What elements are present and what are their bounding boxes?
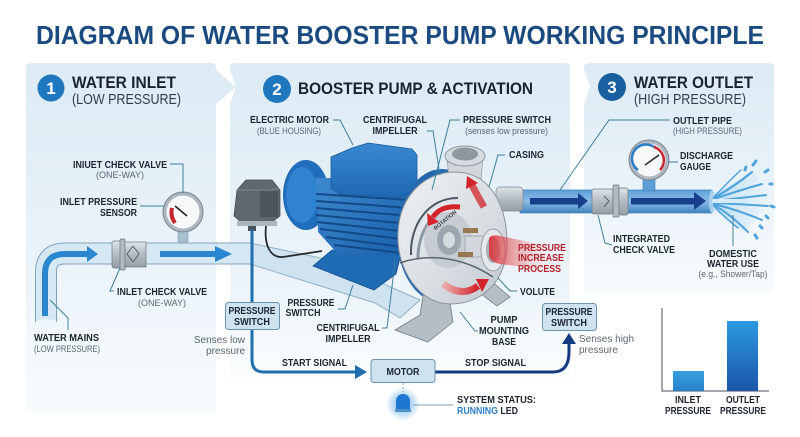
label: system status: RUNNING LED — [457, 406, 518, 417]
casing eye shaft — [458, 228, 505, 271]
label: pump mounting base: BASE — [492, 337, 516, 348]
motor terminal box — [331, 143, 417, 197]
label: pressure increase process: INCREASE — [518, 252, 564, 264]
label: pump mounting base — [479, 315, 529, 348]
title: DIAGRAM OF WATER BOOSTER PUMP WORKING PRINCIPLE — [36, 20, 764, 50]
axis label: inlet pressure: INLET — [675, 395, 702, 406]
inlet pipe — [35, 246, 252, 327]
label: water mains — [34, 333, 100, 354]
label: senses high pressure: pressure — [579, 345, 618, 356]
casing front lip — [400, 258, 493, 277]
axis label: inlet pressure — [665, 395, 711, 417]
box: motor: MOTOR — [386, 367, 420, 378]
axis label: inlet pressure: PRESSURE — [665, 406, 711, 417]
arrow: rotation: ROTATION — [433, 209, 458, 232]
label: pressure switch lower — [286, 298, 335, 319]
label: domestic water use: DOMESTIC — [709, 249, 758, 260]
heading: step 3 water outlet — [598, 73, 754, 108]
box: motor — [371, 360, 435, 382]
label: centrifugal impeller lower: CENTRIFUGAL — [316, 323, 380, 334]
label: centrifugal impeller top — [363, 115, 427, 137]
outlet neck — [447, 155, 483, 195]
label: centrifugal impeller top: IMPELLER — [372, 126, 418, 137]
arrow: inlet flow elbow — [45, 246, 98, 316]
label: pressure switch lower: PRESSURE — [288, 298, 335, 309]
motor ribbed body — [316, 178, 410, 256]
arrow: pressure rise up — [466, 176, 484, 207]
heading: step 3 water outlet: (HIGH PRESSURE) — [634, 91, 746, 108]
label: senses high pressure: Senses high — [579, 334, 634, 345]
bar: outlet pressure — [727, 321, 758, 391]
heading: step 3 water outlet: 3 — [607, 78, 617, 97]
label: iniuet check valve: INIUET CHECK VALVE — [73, 160, 167, 171]
axis label: outlet pressure: OUTLET — [726, 395, 761, 406]
label: pressure switch top — [463, 115, 551, 136]
icon: inlet check valve — [112, 239, 146, 270]
label: water mains: (LOW PRESSURE) — [34, 344, 100, 354]
label: pressure increase process: PRESSURE — [518, 242, 566, 254]
icon: water spray — [713, 161, 774, 238]
pressure glow — [489, 235, 550, 270]
label: domestic water use — [698, 249, 768, 279]
label: outlet pipe: OUTLET PIPE — [673, 116, 732, 127]
label: senses high pressure — [579, 334, 634, 356]
label: pump mounting base: PUMP — [490, 315, 518, 326]
label: volute: VOLUTE — [520, 287, 555, 298]
label: iniuet check valve — [73, 160, 167, 180]
motor foot — [313, 250, 402, 290]
label: inlet check valve — [117, 287, 207, 308]
label: pressure increase process — [518, 242, 566, 275]
box: pressure switch left: PRESSURE — [228, 306, 276, 317]
casing volute body — [398, 172, 507, 304]
heading: step 1 water inlet: 1 — [46, 79, 56, 98]
signal line: start — [252, 230, 367, 379]
box: pressure switch right: SWITCH — [551, 318, 587, 329]
bar: inlet pressure — [673, 371, 704, 391]
label: iniuet check valve: (ONE-WAY) — [96, 170, 144, 180]
pump foot left — [395, 290, 453, 342]
heading: step 1 water inlet: (LOW PRESSURE) — [72, 91, 181, 108]
side discharge — [496, 187, 523, 211]
pump foot right — [476, 280, 510, 306]
panel: water inlet background — [26, 63, 236, 413]
impeller cavity — [405, 190, 472, 268]
label: pressure switch top: PRESSURE SWITCH — [463, 115, 551, 126]
icon: running LED — [386, 383, 453, 421]
label: pressure increase process: PROCESS — [518, 263, 561, 275]
heading: step 1 water inlet — [38, 73, 181, 108]
label: integrated check valve: CHECK VALVE — [613, 245, 675, 256]
label: casing: CASING — [509, 150, 544, 161]
arrow: rotation — [427, 207, 460, 232]
outlet pipe — [520, 190, 715, 213]
label: system status: SYSTEM STATUS: — [457, 395, 536, 406]
label: domestic water use: WATER USE — [707, 259, 759, 270]
heading: step 3 water outlet: WATER OUTLET — [634, 73, 754, 92]
label: pressure switch top: (senses low pressure) — [465, 126, 548, 136]
leader lines — [50, 120, 733, 331]
label: pump mounting base: MOUNTING — [479, 326, 529, 337]
signal line: stop — [435, 333, 576, 372]
label: senses low pressure — [194, 335, 246, 357]
label: inlet check valve: INLET CHECK VALVE — [117, 287, 207, 298]
label: inlet pressure sensor: INLET PRESSURE — [60, 197, 137, 208]
arrow: outlet flow right — [631, 192, 706, 210]
label: electric motor: (BLUE HOUSING) — [257, 126, 321, 136]
label: electric motor — [250, 115, 330, 136]
axis label: outlet pressure — [720, 395, 766, 417]
label: discharge gauge: GAUGE — [680, 162, 711, 173]
heading: step 1 water inlet: WATER INLET — [72, 73, 177, 92]
label: water mains: WATER MAINS — [34, 333, 99, 344]
box: pressure switch right — [542, 304, 596, 330]
label: inlet check valve: (ONE-WAY) — [138, 298, 186, 308]
arrow: inlet flow straight — [160, 246, 232, 262]
label: senses low pressure: Senses low — [194, 335, 246, 346]
label: discharge gauge — [680, 151, 733, 173]
label: senses low pressure: pressure — [206, 346, 245, 357]
label: discharge gauge: DISCHARGE — [680, 151, 733, 162]
panel: water outlet background — [584, 63, 774, 293]
label: integrated check valve — [613, 234, 675, 256]
label: centrifugal impeller top: CENTRIFUGAL — [363, 115, 427, 126]
label: outlet pipe: (HIGH PRESSURE) — [673, 126, 742, 136]
axis label: outlet pressure: PRESSURE — [720, 406, 766, 417]
label: outlet pipe — [673, 116, 742, 136]
box: pressure switch left: SWITCH — [234, 317, 270, 328]
label: start signal: START SIGNAL — [282, 358, 347, 369]
label: centrifugal impeller lower — [316, 323, 380, 345]
label: electric motor: ELECTRIC MOTOR — [250, 115, 330, 126]
label: inlet pressure sensor — [60, 197, 138, 219]
label: system status — [457, 395, 536, 417]
box: pressure switch right: PRESSURE — [546, 307, 593, 318]
heading: step 2 booster pump: BOOSTER PUMP & ACTIVATION — [298, 79, 533, 98]
bar chart: inlet vs outlet pressure — [662, 308, 769, 417]
outlet flange — [445, 146, 485, 166]
casing rear blue rim — [397, 169, 487, 303]
icon: discharge gauge — [629, 140, 669, 191]
mounting slab under pump — [250, 243, 420, 318]
label: domestic water use: (e.g., Shower/Tap) — [698, 269, 768, 279]
label: integrated check valve: INTEGRATED — [613, 234, 670, 245]
heading: step 2 booster pump — [263, 75, 533, 103]
label: pressure switch lower: SWITCH — [286, 308, 320, 319]
icon: pressure switch device — [234, 180, 322, 257]
label: inlet pressure sensor: SENSOR — [100, 208, 138, 219]
label: stop signal: STOP SIGNAL — [465, 358, 526, 369]
icon: inlet pressure gauge — [163, 192, 203, 242]
heading: step 2 booster pump: 2 — [272, 80, 282, 99]
label: centrifugal impeller lower: IMPELLER — [326, 334, 371, 345]
motor end cap — [283, 160, 329, 230]
pump assembly — [283, 143, 550, 342]
arrow: outlet flow left — [530, 193, 588, 209]
box: pressure switch left — [226, 302, 280, 330]
arrow: pressure rise volute — [443, 279, 489, 292]
icon: integrated check valve — [592, 185, 628, 217]
panel: booster pump background — [230, 63, 570, 383]
